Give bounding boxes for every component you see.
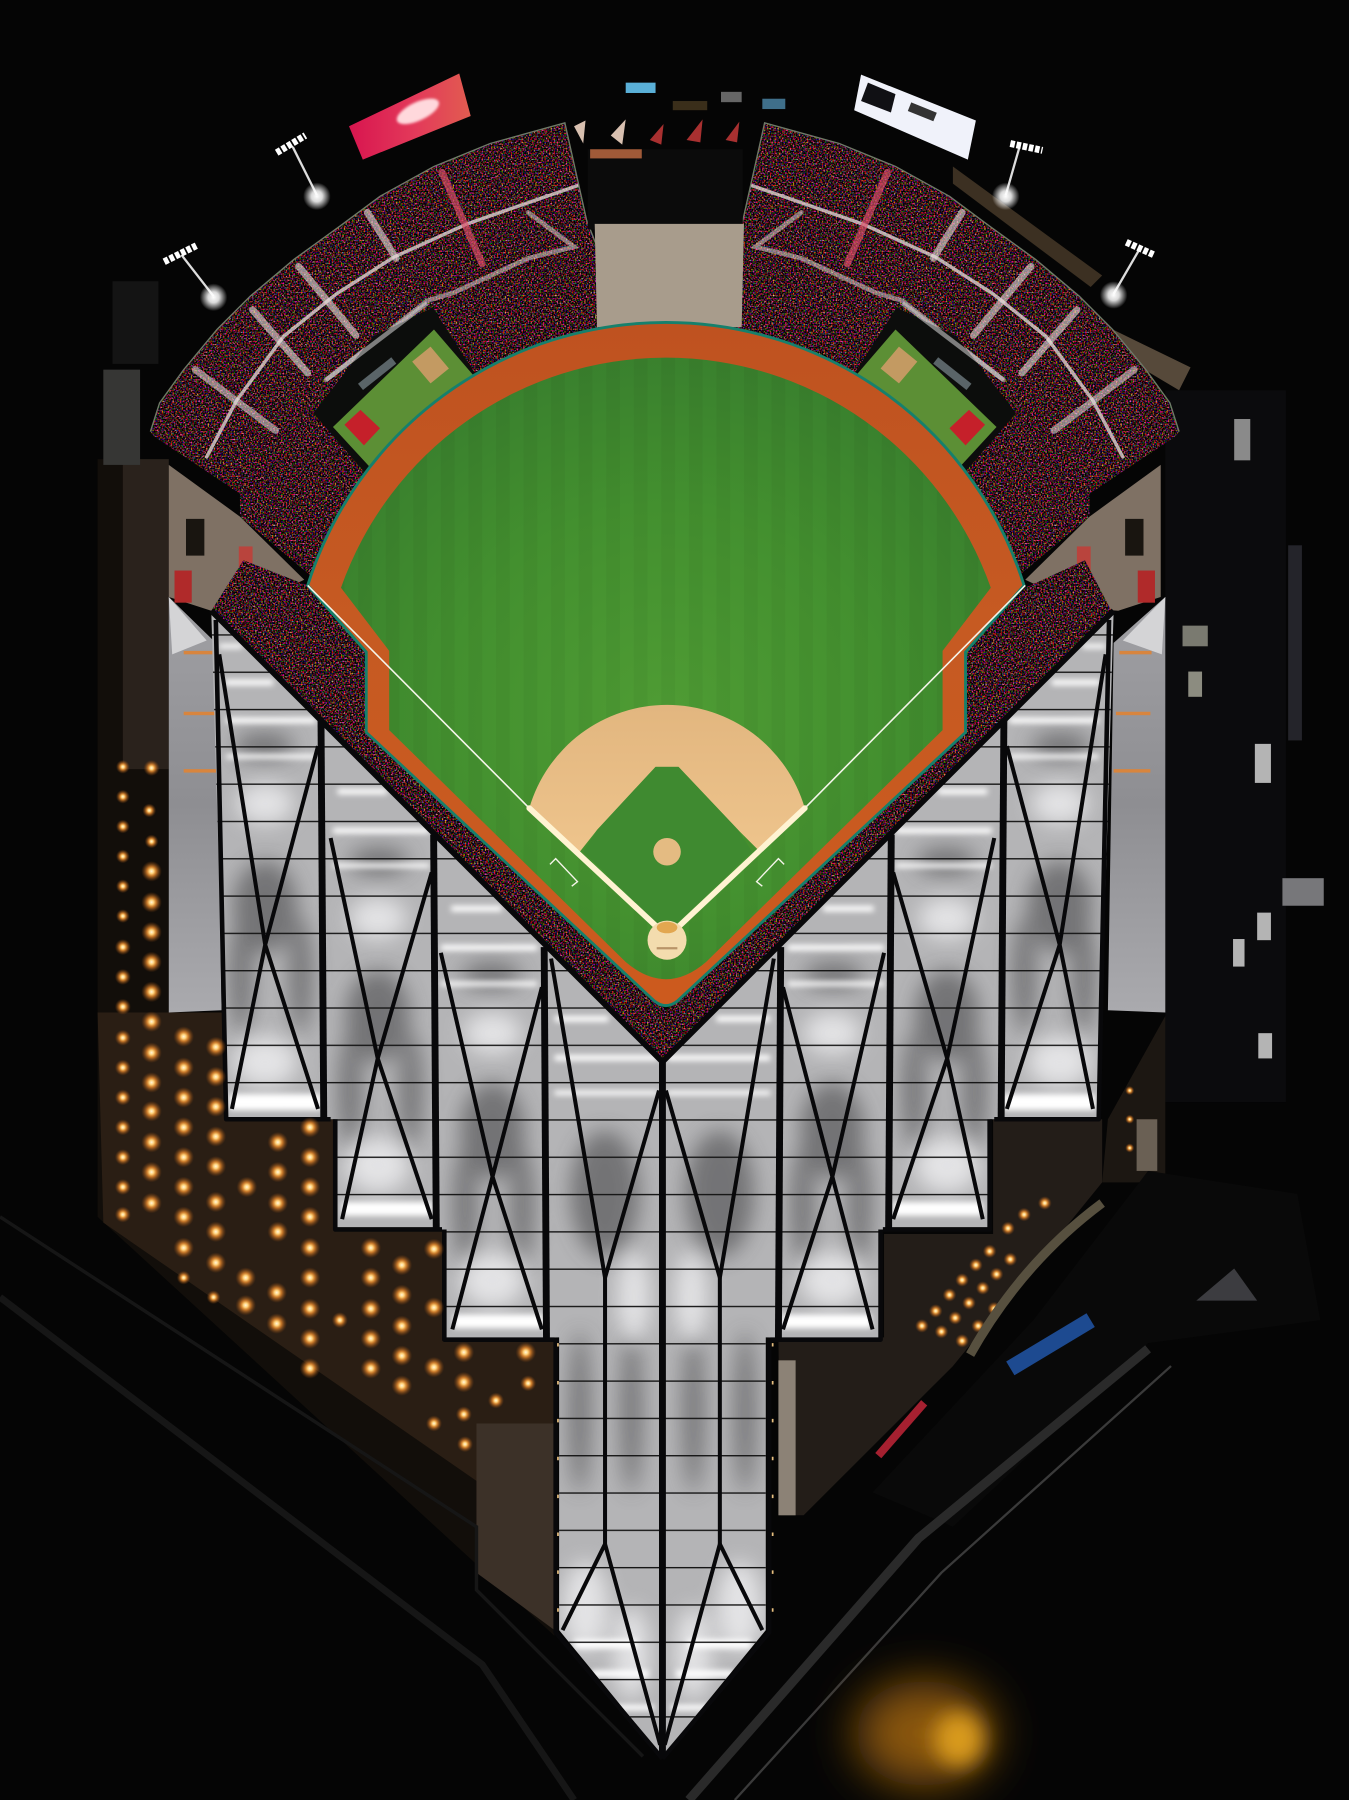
- curved ramp: [970, 1203, 1102, 1355]
- left roof: [207, 603, 666, 1762]
- outfield and infield grass: [341, 358, 991, 979]
- pitcher mound: [653, 838, 681, 866]
- road lower left: [0, 1217, 643, 1800]
- left stand: [144, 115, 614, 611]
- flags: [574, 119, 739, 145]
- plaza lamps: [115, 760, 536, 1452]
- infield dirt: [529, 705, 805, 852]
- parked vehicles: [1183, 419, 1272, 1058]
- right stand: [715, 115, 1186, 611]
- floodlights: [164, 135, 1154, 311]
- red video board: [349, 73, 471, 160]
- right roof: [659, 603, 1118, 1762]
- surrounding ground left: [98, 281, 556, 1636]
- home plate circle: [648, 921, 687, 960]
- side canopy right: [1108, 597, 1165, 1012]
- ramp lights right: [915, 1086, 1134, 1348]
- foul lines: [308, 585, 1025, 886]
- baselines: [529, 808, 805, 930]
- road lower right: [689, 1320, 1171, 1800]
- infield diamond grass: [583, 767, 752, 925]
- white scoreboard: [854, 75, 976, 160]
- tree glow bottom: [855, 1681, 993, 1786]
- side canopy left: [169, 597, 222, 1012]
- centre field apron: [588, 149, 744, 327]
- surrounding ground right: [778, 166, 1324, 1527]
- lower seating strips: [211, 560, 1111, 1062]
- concessions lights top: [626, 83, 785, 110]
- warning track: [308, 322, 1024, 1006]
- roof edge lights: [558, 1343, 773, 1630]
- grass mowing stripes: [341, 358, 991, 979]
